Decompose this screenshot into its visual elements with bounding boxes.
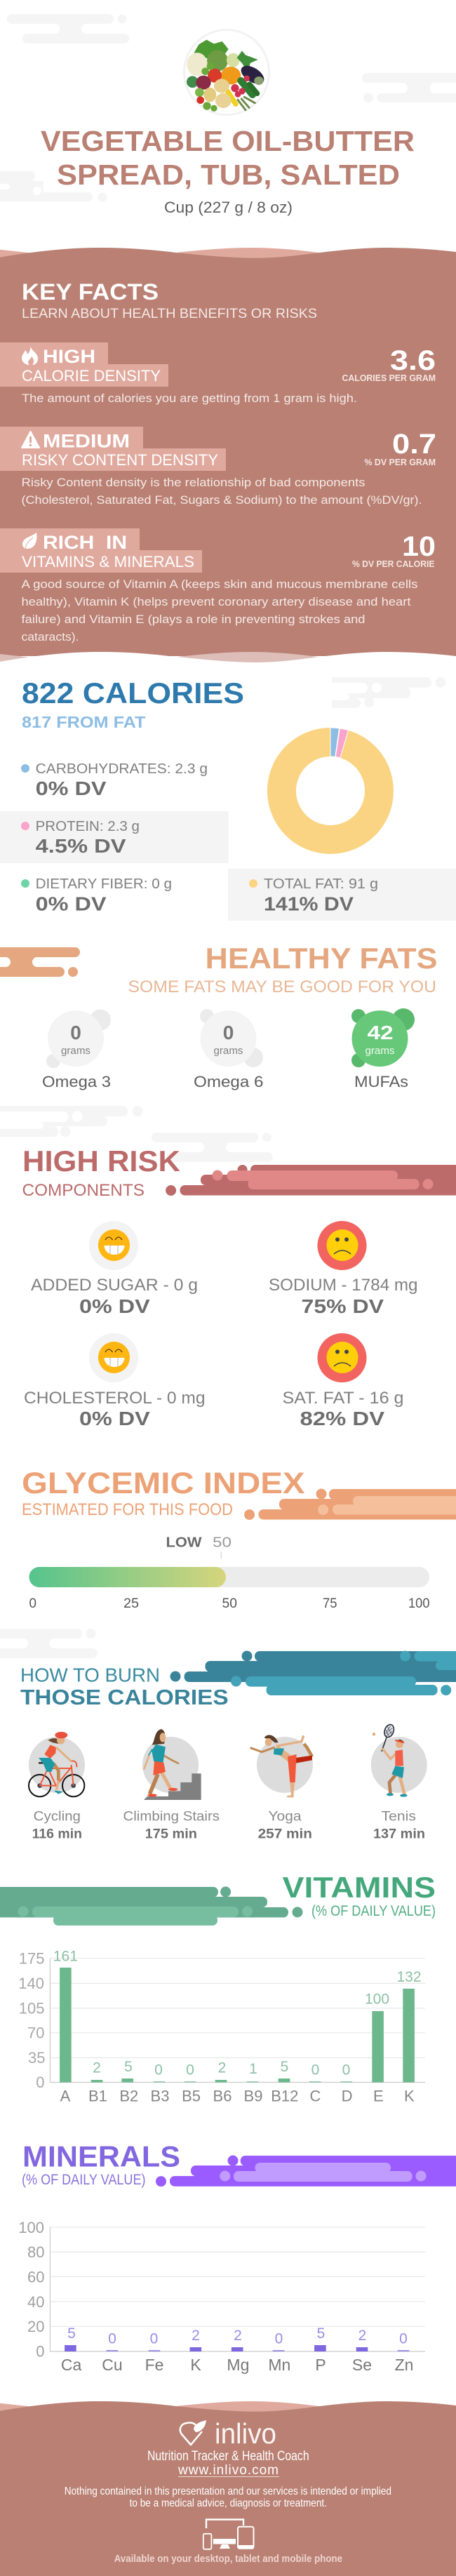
category labels: E <box>373 2088 384 2105</box>
category labels <box>61 2356 413 2374</box>
y axis labels: 0 <box>36 2074 45 2091</box>
description: The amount of calories you are getting from 1 gram is high. <box>22 392 357 405</box>
category labels: A <box>60 2088 71 2105</box>
item: added sugar: ADDED SUGAR - 0 g <box>31 1276 198 1295</box>
heading: how to burn: HOW TO BURN <box>20 1664 160 1686</box>
decoration: red cloud <box>166 1165 456 1196</box>
stat: mufas: MUFAs <box>354 1073 408 1090</box>
item: saturated fat: SAT. FAT - 16 g <box>282 1389 404 1408</box>
item: added sugar <box>31 1221 198 1317</box>
panel: how to burn those calories <box>20 1650 456 1842</box>
y axis labels: 80 <box>27 2243 45 2261</box>
icon: leaf <box>22 533 36 549</box>
label: calorie density: CALORIE DENSITY <box>22 367 161 385</box>
category labels <box>60 2088 415 2105</box>
decoration: teal cloud <box>170 1650 456 1695</box>
value labels: 2 <box>192 2328 200 2344</box>
legend: protein: 4.5% DV <box>36 835 126 857</box>
logo: inlivo: inlivo <box>215 2417 276 2450</box>
legend: carbohydrates: CARBOHYDRATES: 2.3 g <box>36 761 208 777</box>
disclaimer <box>65 2485 391 2509</box>
value labels: 0 <box>186 2062 194 2078</box>
title <box>41 125 415 191</box>
background clouds: header <box>0 14 456 202</box>
gauge label: low 50: 50 <box>213 1535 232 1551</box>
value labels: 0 <box>342 2062 350 2078</box>
value labels: 0 <box>311 2062 319 2078</box>
item: saturated fat: 82% DV <box>300 1408 384 1429</box>
value labels: 2 <box>358 2328 366 2344</box>
label: vitamins and minerals: VITAMINS & MINERALS <box>22 553 194 570</box>
value labels: 0 <box>275 2331 283 2347</box>
value labels: 0 <box>399 2331 408 2347</box>
category labels: B12 <box>271 2088 298 2105</box>
heading: minerals: MINERALS <box>22 2140 180 2173</box>
stat: omega 3: grams <box>61 1045 90 1057</box>
gauge label: low 50 <box>166 1535 232 1559</box>
stat: omega 3 <box>42 1009 111 1090</box>
y axis labels: 60 <box>27 2268 45 2286</box>
category labels: Mn <box>268 2356 290 2374</box>
y axis labels: 70 <box>27 2024 45 2042</box>
legend: dietary fiber: DIETARY FIBER: 0 g <box>36 876 172 892</box>
unit: calories per gram: CALORIES PER GRAM <box>342 373 436 383</box>
y axis labels: 40 <box>27 2293 45 2311</box>
subheading: (% OF DAILY VALUE) <box>311 1903 436 1919</box>
item: sodium <box>269 1221 418 1317</box>
y axis labels: 0 <box>36 2342 45 2361</box>
stat: omega 6: 0 <box>223 1022 234 1043</box>
heading: those calories: THOSE CALORIES <box>20 1685 229 1709</box>
description: failure) and Vitamin E (plays a role in preventing strokes and <box>21 613 365 626</box>
decoration: green cloud <box>0 1886 303 1926</box>
image: vegetables in a circle <box>184 29 269 115</box>
category labels: C <box>309 2088 321 2105</box>
band: protein <box>0 811 229 863</box>
gauge bar <box>29 1567 429 1587</box>
title: VEGETABLE OIL-BUTTER <box>41 125 415 157</box>
unit: dv per calorie: % DV PER CALORIE <box>352 559 435 569</box>
item: cholesterol: CHOLESTEROL - 0 mg <box>24 1389 205 1408</box>
value: 10: 10 <box>402 531 436 562</box>
stat: omega 3: Omega 3 <box>42 1073 111 1090</box>
activity: cycling: Cycling <box>34 1810 81 1824</box>
tagline: Nutrition Tracker & Health Coach <box>147 2449 309 2464</box>
category labels: Se <box>352 2356 372 2374</box>
gauge axis <box>29 1596 430 1611</box>
value labels: 5 <box>317 2325 325 2342</box>
value labels: 1 <box>249 2061 257 2077</box>
category labels: B6 <box>213 2088 232 2105</box>
activity: tennis: 137 min <box>373 1827 425 1842</box>
stat: omega 6: Omega 6 <box>194 1073 264 1090</box>
legend: protein: PROTEIN: 2.3 g <box>36 819 140 834</box>
background clouds: high risk <box>0 1106 273 1162</box>
item: added sugar: 0% DV <box>79 1295 150 1317</box>
legend: dietary fiber: 0% DV <box>36 893 107 915</box>
fact: high calorie density <box>0 342 436 405</box>
panel: minerals <box>18 2140 456 2374</box>
panel: glycemic index <box>22 1467 456 1611</box>
label: medium: MEDIUM <box>43 431 130 452</box>
gauge axis: 100 <box>408 1596 430 1611</box>
bar chart: minerals <box>18 2219 425 2374</box>
label: high: HIGH <box>43 346 95 367</box>
y axis labels: 100 <box>18 2219 44 2236</box>
legend: total fat <box>249 876 378 915</box>
activity: yoga: Yoga <box>268 1810 302 1824</box>
activity: yoga: 257 min <box>258 1827 312 1842</box>
subheading: components: COMPONENTS <box>22 1181 145 1200</box>
category labels: Mg <box>227 2356 249 2374</box>
value labels: 132 <box>396 1969 422 1985</box>
panel: footer <box>0 2401 456 2576</box>
serving size: Cup (227 g / 8 oz) <box>164 199 293 216</box>
legend: carbohydrates: 0% DV <box>36 778 107 799</box>
stat: mufas: 42 <box>368 1022 393 1043</box>
description <box>21 476 422 507</box>
y axis labels: 20 <box>27 2318 45 2335</box>
subheading: (% OF DAILY VALUE) <box>22 2172 146 2188</box>
description: Risky Content density is the relationship of bad components <box>21 476 365 489</box>
category labels: Fe <box>145 2356 163 2374</box>
y axis labels: 105 <box>19 2000 45 2017</box>
subheading: ESTIMATED FOR THIS FOOD <box>22 1500 233 1519</box>
value labels: 0 <box>150 2331 158 2347</box>
activity: yoga <box>250 1735 313 1842</box>
activity: climbing stairs: Climbing Stairs <box>123 1810 220 1824</box>
category labels: D <box>342 2088 353 2105</box>
activity: tennis <box>371 1723 427 1842</box>
gauge axis: 25 <box>123 1596 139 1611</box>
y axis labels: 175 <box>19 1950 45 1968</box>
activity: climbing stairs <box>123 1729 220 1842</box>
y axis labels: 140 <box>18 1975 44 1992</box>
icon: warning triangle <box>22 432 39 448</box>
panel: key facts <box>0 248 456 667</box>
stat: mufas <box>351 1008 415 1090</box>
y axis labels <box>18 1950 45 2091</box>
value labels: 2 <box>218 2060 226 2076</box>
value labels: 2 <box>234 2328 242 2344</box>
category labels: B3 <box>151 2088 169 2105</box>
legend: total fat: TOTAL FAT: 91 g <box>264 876 378 892</box>
y axis labels <box>18 2219 45 2361</box>
activity: tennis: Tenis <box>382 1810 416 1824</box>
subheading: from fat: 817 FROM FAT <box>22 713 145 731</box>
background cloud: burn <box>0 1629 98 1658</box>
gauge axis: 0 <box>29 1596 36 1611</box>
heading: 822 calories: 822 CALORIES <box>22 676 244 709</box>
value labels: 100 <box>365 1991 389 2008</box>
value labels <box>53 1949 422 2078</box>
legend: carbohydrates <box>21 761 208 799</box>
activity: cycling <box>29 1732 85 1842</box>
availability note: Available on your desktop, tablet and mobile phone <box>114 2553 342 2565</box>
panel: high risk components <box>22 1144 456 1429</box>
category labels: K <box>190 2356 201 2374</box>
heading: key facts: KEY FACTS <box>22 279 159 305</box>
stat: omega 6 <box>194 1009 264 1090</box>
description <box>21 578 418 643</box>
stat: omega 6: grams <box>213 1045 243 1057</box>
heading: vitamins: VITAMINS <box>282 1871 436 1904</box>
unit: dv per gram: % DV PER GRAM <box>365 457 436 467</box>
panel: vitamins <box>0 1871 436 2105</box>
icon: devices <box>203 2519 254 2549</box>
category labels: Cu <box>102 2356 123 2374</box>
description: (Cholesterol, Saturated Fat, Sugars & Sodium) to the amount (%DV/gr). <box>21 493 422 507</box>
item: cholesterol: 0% DV <box>79 1408 150 1429</box>
activity: cycling: 116 min <box>32 1827 82 1842</box>
decoration: orange cloud <box>244 1489 456 1520</box>
item: sodium: 75% DV <box>302 1295 384 1317</box>
item: sodium: SODIUM - 1784 mg <box>269 1276 418 1295</box>
heading: high risk: HIGH RISK <box>22 1144 180 1177</box>
description: cataracts). <box>21 630 79 643</box>
value labels <box>67 2325 408 2347</box>
logo: inlivo <box>180 2417 276 2450</box>
label: risky content density: RISKY CONTENT DENSITY <box>22 451 218 469</box>
donut chart <box>282 728 379 839</box>
value labels: 5 <box>281 2059 288 2075</box>
category labels: Ca <box>61 2356 82 2374</box>
label: rich in: RICH IN <box>43 532 127 553</box>
gauge axis: 75 <box>323 1596 337 1611</box>
category labels: B9 <box>244 2088 262 2105</box>
value labels: 161 <box>53 1949 78 1965</box>
value labels: 0 <box>108 2331 116 2347</box>
band: total fat <box>228 869 456 921</box>
value labels: 5 <box>67 2325 76 2342</box>
y axis labels: 35 <box>28 2049 45 2067</box>
decoration: orange cloud <box>0 947 80 977</box>
item: saturated fat <box>282 1333 404 1429</box>
bars <box>65 2345 409 2351</box>
subheading: key facts: LEARN ABOUT HEALTH BENEFITS OR RISKS <box>22 306 317 321</box>
stat: mufas: grams <box>365 1045 394 1057</box>
heading: healthy fats: HEALTHY FATS <box>205 942 438 975</box>
value labels: 5 <box>124 2059 133 2075</box>
category labels: B5 <box>182 2088 201 2105</box>
subheading: SOME FATS MAY BE GOOD FOR YOU <box>128 977 436 996</box>
panel: calories <box>0 676 456 921</box>
item: cholesterol <box>24 1333 205 1429</box>
title: SPREAD, TUB, SALTED <box>57 159 400 191</box>
value labels: 0 <box>154 2062 163 2078</box>
category labels: B1 <box>88 2088 107 2105</box>
decoration: purple cloud <box>156 2156 456 2187</box>
category labels: K <box>404 2088 415 2105</box>
bar chart: vitamins <box>18 1949 425 2105</box>
value: 3.6: 3.6 <box>390 345 436 376</box>
gauge axis: 50 <box>222 1596 237 1611</box>
bars <box>60 1968 415 2083</box>
fact: rich in vitamins and minerals <box>0 528 436 643</box>
legend: protein <box>21 819 140 857</box>
value: 0.7: 0.7 <box>392 429 436 460</box>
disclaimer: to be a medical advice, diagnosis or treatment. <box>130 2497 327 2509</box>
legend: total fat: 141% DV <box>264 893 354 915</box>
legend: dietary fiber <box>21 876 172 915</box>
activity: climbing stairs: 175 min <box>145 1827 197 1842</box>
category labels: B2 <box>119 2088 138 2105</box>
stat: omega 3: 0 <box>70 1022 81 1043</box>
icon: flame <box>22 346 38 365</box>
panel: healthy fats <box>0 942 438 1090</box>
website link: www.inlivo.com <box>177 2463 279 2478</box>
category labels: Zn <box>395 2356 413 2374</box>
category labels: P <box>315 2356 326 2374</box>
disclaimer: Nothing contained in this presentation and our services is intended or implied <box>65 2485 391 2497</box>
gauge label: low 50: LOW <box>166 1535 202 1551</box>
value labels: 2 <box>93 2060 101 2076</box>
description: A good source of Vitamin A (keeps skin and mucous membrane cells <box>21 578 418 591</box>
description: healthy), Vitamin K (helps prevent coronary artery disease and heart <box>21 595 411 608</box>
fact: medium risky content density <box>0 427 436 507</box>
heading: glycemic index: GLYCEMIC INDEX <box>22 1467 305 1500</box>
